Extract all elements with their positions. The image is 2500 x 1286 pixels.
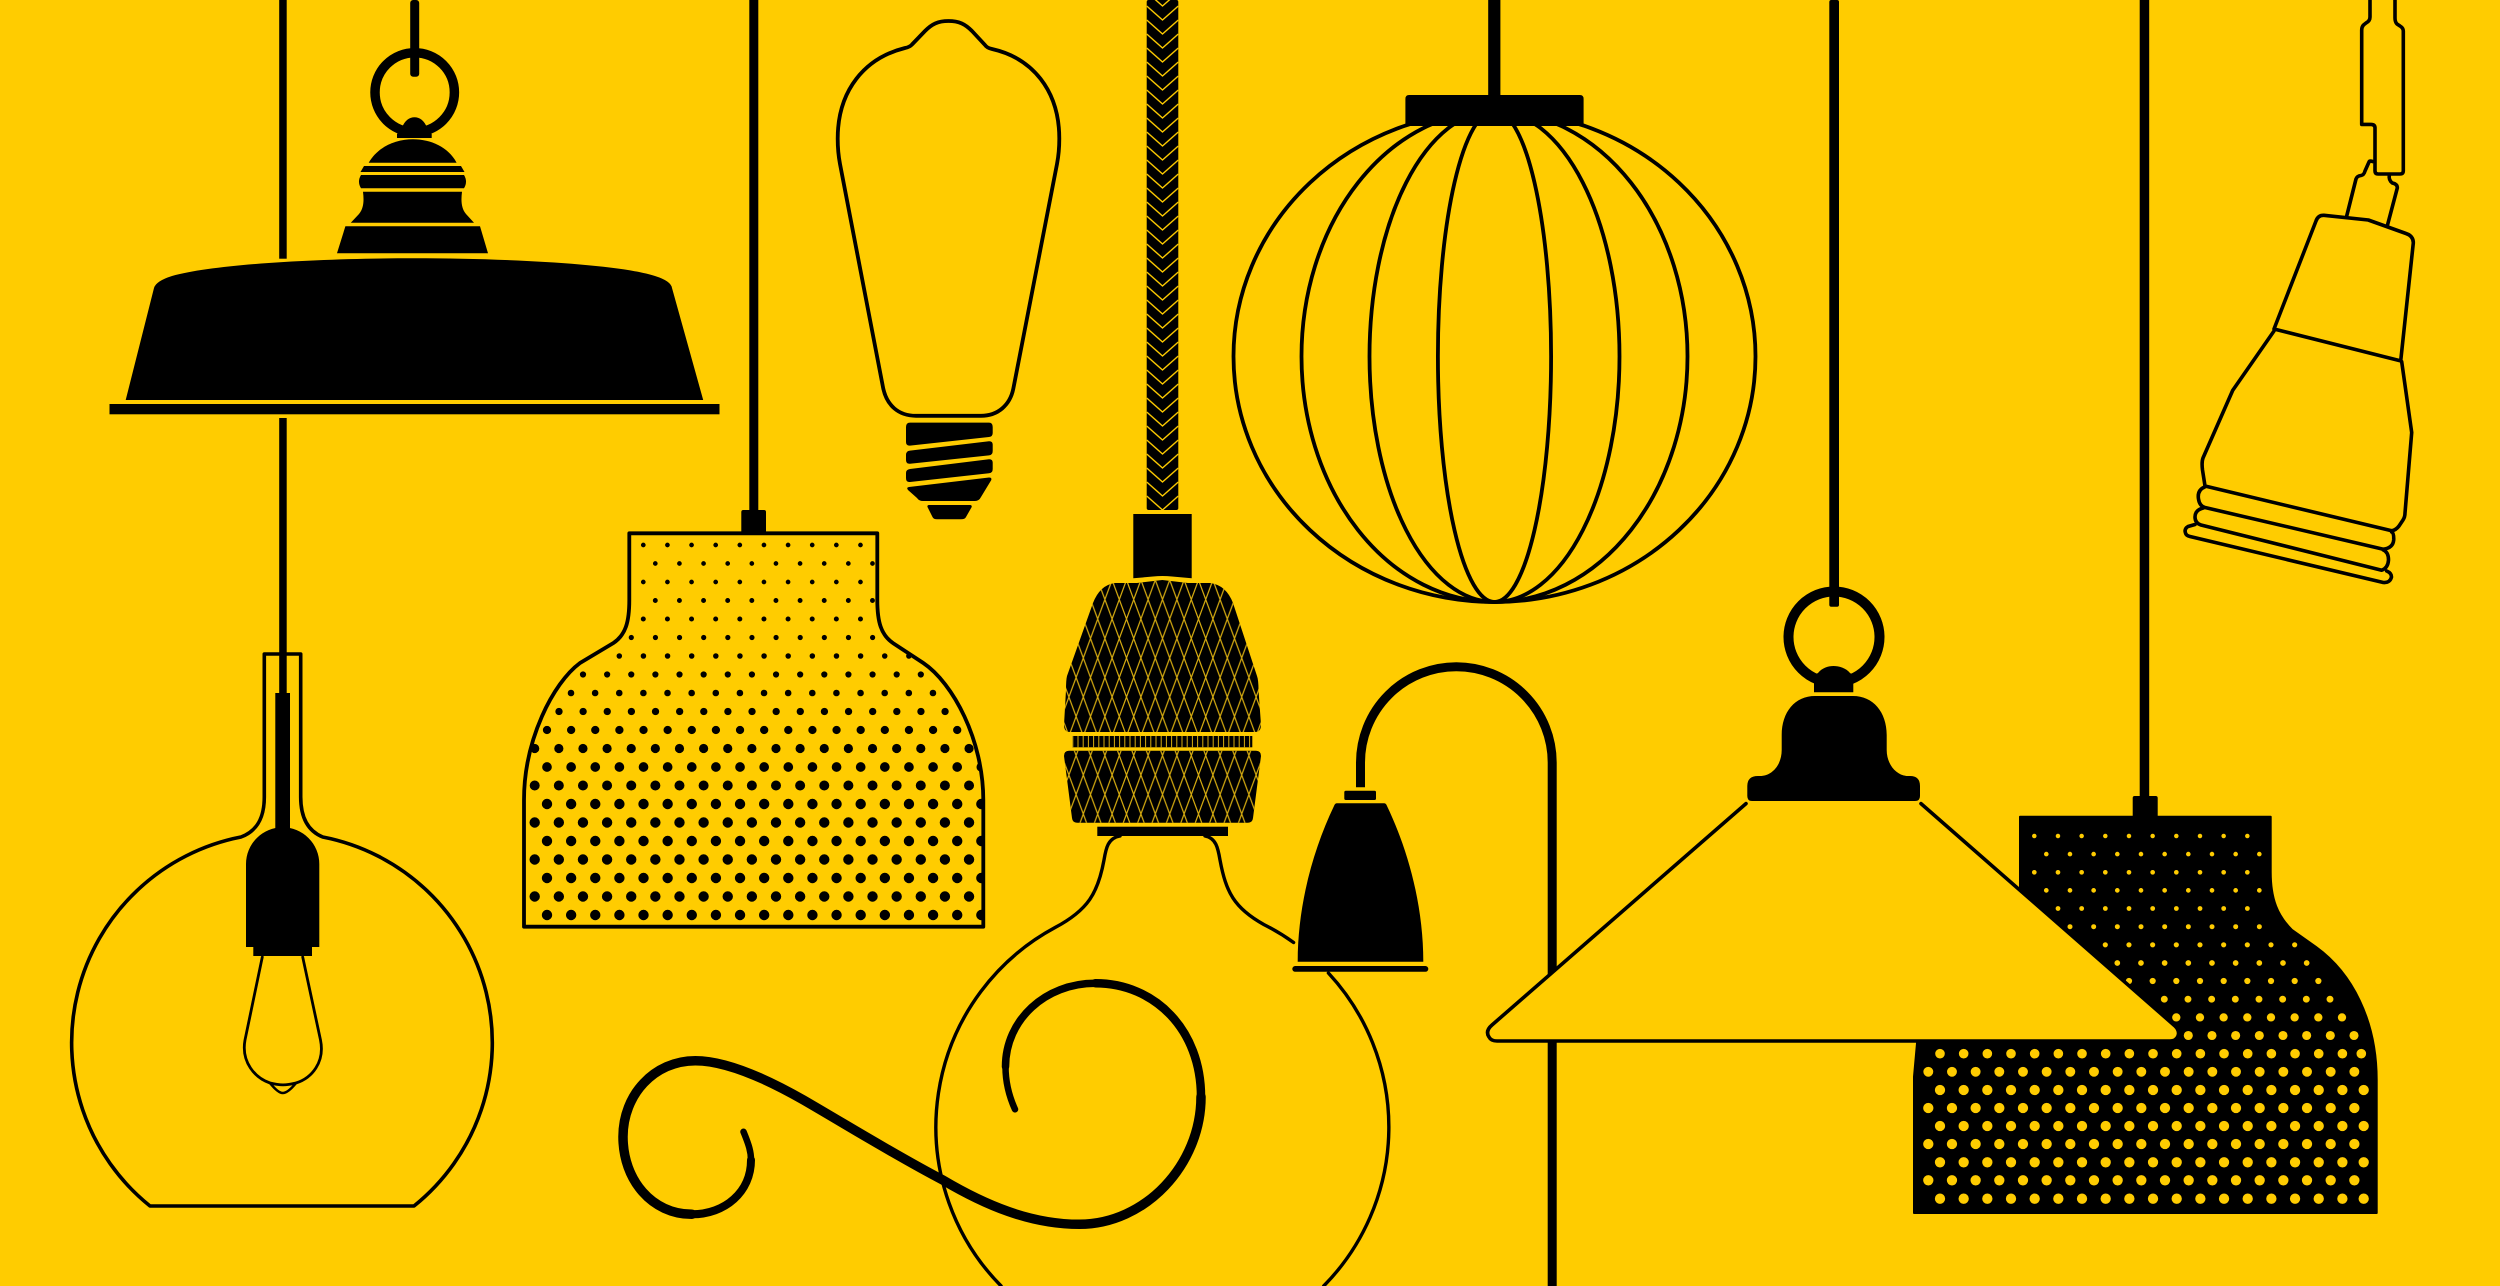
lamp: Edison bulb: [838, 21, 1059, 519]
lamp: yellow cone shade with ring: [1488, 0, 2179, 1041]
lamp: curved arm with black bell shade: [1292, 667, 1552, 1286]
perforation dots: [535, 545, 982, 915]
lamp: tilted outline spotlight: [2185, 0, 2413, 583]
perforation dots: [1928, 836, 2364, 1199]
lamp: large round glass with braided cord and mesh socket: [936, 0, 1389, 1286]
lamp: dotted bottle shade outline: [524, 0, 983, 927]
lamp: black dotted shade behind cone: [1914, 0, 2377, 1213]
lamp: black industrial shade with ring: [110, 0, 720, 414]
lamp: clear globe pendant with small bulb: [72, 0, 492, 1206]
decorative scroll: [623, 983, 1201, 1224]
lamp: large ribbed globe lantern: [1234, 0, 1756, 602]
